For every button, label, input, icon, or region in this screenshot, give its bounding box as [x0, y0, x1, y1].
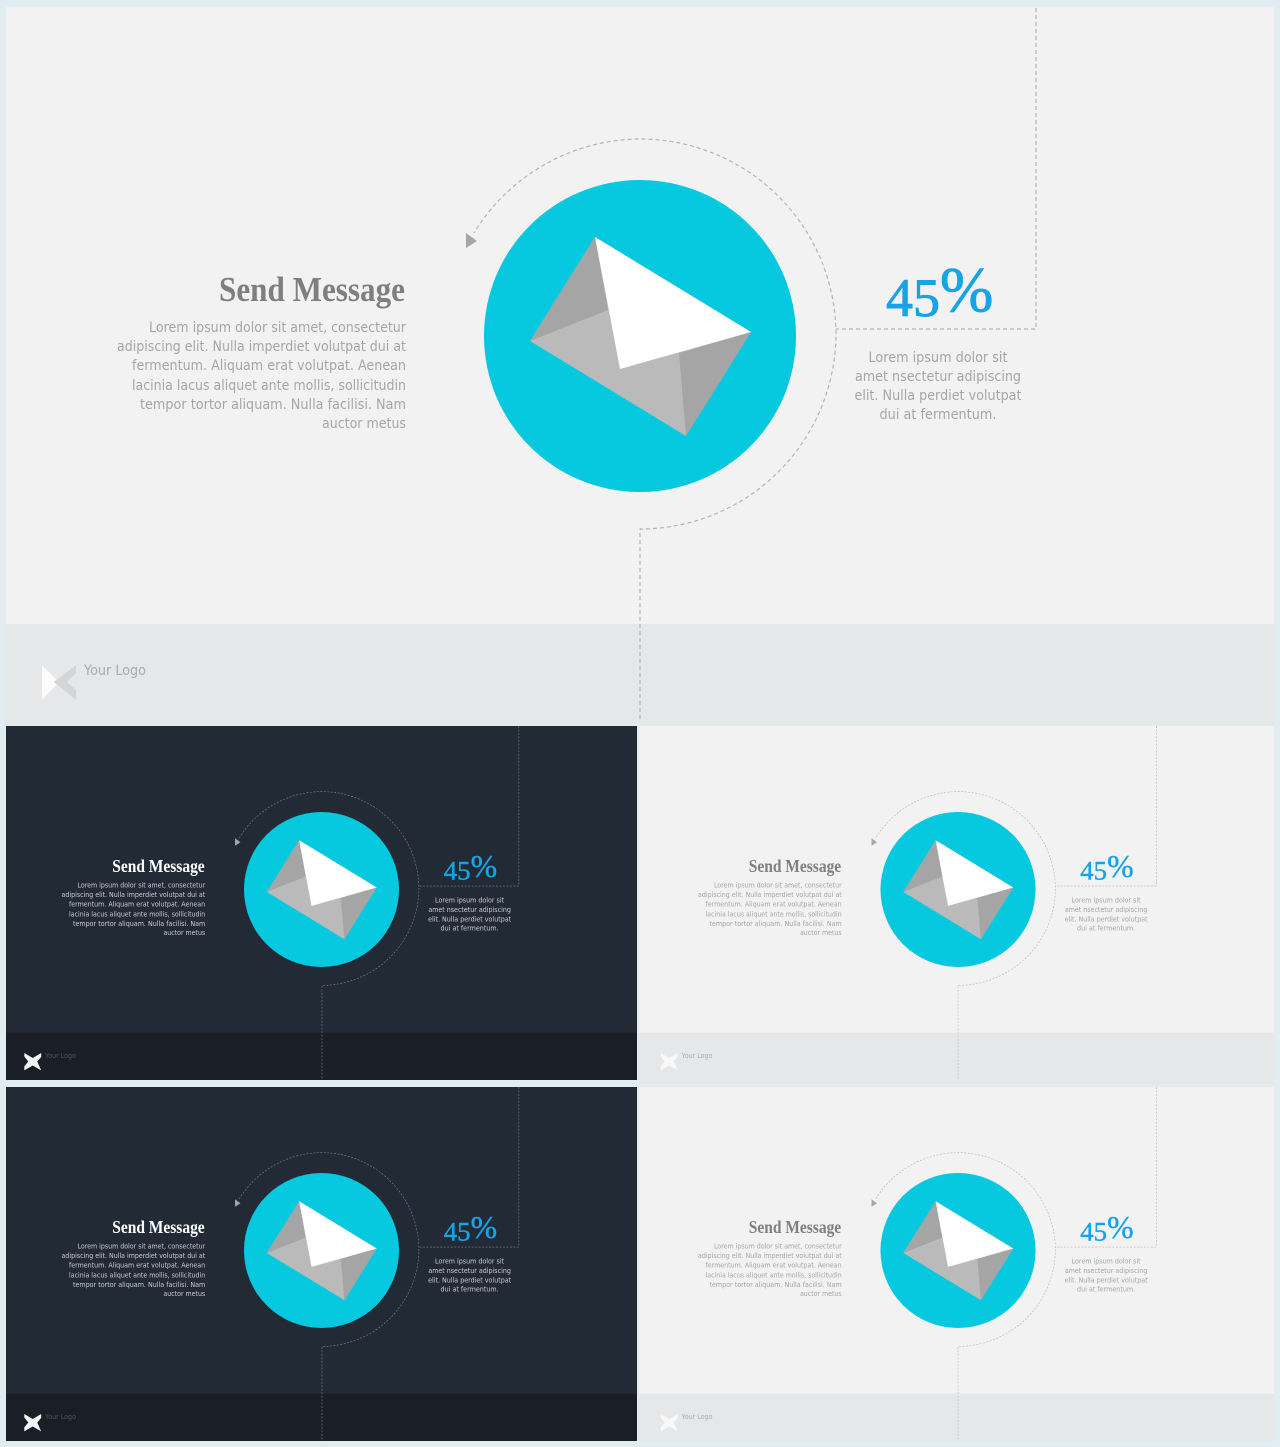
logo: Your Logo — [44, 1051, 76, 1060]
percentage figure: 45 — [444, 856, 471, 886]
dashed connector and ring with arrow — [466, 8, 1036, 719]
text block: description: tempor tortor aliquam. Nulla facilisi. Nam — [73, 1281, 205, 1289]
footer band — [6, 624, 1274, 725]
text block: description: lacinia lacus aliquet ante mollis, sollicitudin — [69, 910, 205, 918]
text block: percentage note: Lorem ipsum dolor sit — [435, 1257, 504, 1265]
text block: description: lacinia lacus aliquet ante mollis, sollicitudin — [132, 378, 406, 394]
text block: percentage note: Lorem ipsum dolor sit — [1072, 1257, 1141, 1265]
text block: description: adipiscing elit. Nulla imperdiet volutpat dui at — [62, 1252, 205, 1260]
text block: percentage note — [1065, 896, 1148, 933]
logo — [24, 1051, 76, 1070]
text block: description: Lorem ipsum dolor sit amet, consectetur — [714, 1243, 842, 1251]
text block: description — [62, 1243, 206, 1298]
icon: teal circle with envelope — [880, 812, 1036, 967]
text block: percentage note: elit. Nulla perdiet volutpat — [854, 388, 1022, 404]
percentage figure: 45 — [444, 1217, 471, 1247]
text block: description — [117, 320, 406, 432]
text block: description: adipiscing elit. Nulla imperdiet volutpat dui at — [62, 891, 205, 899]
text block: description: Lorem ipsum dolor sit amet, consectetur — [77, 1243, 205, 1251]
text block: description: fermentum. Aliquam erat volutpat. Aenean — [69, 900, 205, 908]
text block: description: Lorem ipsum dolor sit amet, consectetur — [714, 882, 842, 890]
percentage figure: % — [471, 849, 497, 884]
percentage figure: 45 — [1080, 1217, 1107, 1247]
footer band — [639, 1033, 1274, 1085]
text block: percentage note: elit. Nulla perdiet volutpat — [1065, 1276, 1148, 1284]
footer band — [639, 1394, 1274, 1441]
icon: teal circle with envelope — [484, 180, 796, 492]
text block: description: auctor metus — [800, 1290, 842, 1298]
logo: Your Logo — [681, 1051, 712, 1060]
panel: large light slide — [6, 7, 1274, 725]
dashed connector and ring with arrow — [872, 723, 1156, 1079]
text block: percentage note: dui at fermentum. — [441, 1286, 499, 1294]
text block: percentage note — [1065, 1257, 1148, 1294]
percentage figure: 45 — [1080, 856, 1107, 886]
text block: description — [62, 882, 206, 937]
text block: description: lacinia lacus aliquet ante mollis, sollicitudin — [706, 1271, 842, 1279]
text block: description: adipiscing elit. Nulla imperdiet volutpat dui at — [698, 1252, 842, 1260]
heading: Send Message — [112, 1218, 205, 1237]
dashed connector and ring with arrow — [235, 1084, 519, 1447]
text block: description: adipiscing elit. Nulla imperdiet volutpat dui at — [117, 339, 406, 355]
logo — [661, 1412, 712, 1431]
text block: percentage note — [428, 896, 511, 933]
icon: teal circle with envelope — [244, 1173, 399, 1328]
logo — [661, 1053, 712, 1070]
text block: percentage note: Lorem ipsum dolor sit — [868, 350, 1008, 366]
text block: percentage note: amet nsectetur adipiscing — [1065, 1267, 1147, 1275]
text block: description — [698, 1243, 842, 1298]
text block: description: auctor metus — [163, 929, 206, 937]
heading: Send Message — [219, 270, 405, 309]
panel: light slide top — [639, 726, 1274, 1079]
text block: percentage note: amet nsectetur adipiscing — [428, 1267, 511, 1275]
text block: description: tempor tortor aliquam. Nulla facilisi. Nam — [709, 920, 842, 928]
text block: description: adipiscing elit. Nulla imperdiet volutpat dui at — [698, 891, 842, 899]
text block: description: auctor metus — [163, 1290, 206, 1298]
heading: Send Message — [749, 857, 841, 876]
text block: percentage note: amet nsectetur adipiscing — [1065, 906, 1147, 914]
text block: percentage note: elit. Nulla perdiet volutpat — [428, 915, 511, 923]
percentage figure: % — [1107, 849, 1134, 884]
text block: percentage note: dui at fermentum. — [441, 925, 499, 933]
percentage figure: % — [940, 254, 993, 325]
heading: Send Message — [112, 857, 205, 876]
text block: percentage note: dui at fermentum. — [1077, 1286, 1135, 1294]
text block: description: fermentum. Aliquam erat volutpat. Aenean — [132, 358, 406, 374]
percentage figure: 45 — [886, 268, 940, 328]
text block: description: auctor metus — [322, 416, 406, 432]
text block: description: tempor tortor aliquam. Nulla facilisi. Nam — [709, 1281, 842, 1289]
panel: dark slide top — [6, 726, 637, 1080]
text block: percentage note: amet nsectetur adipiscing — [855, 369, 1021, 385]
text block: description: auctor metus — [800, 929, 842, 937]
text block: percentage note: dui at fermentum. — [1077, 925, 1135, 933]
panel: dark slide bottom — [6, 1087, 637, 1441]
dashed connector and ring with arrow — [872, 1084, 1156, 1447]
text block: description: Lorem ipsum dolor sit amet, consectetur — [149, 320, 406, 336]
text block: description: Lorem ipsum dolor sit amet, consectetur — [77, 882, 205, 890]
dashed connector and ring with arrow — [235, 726, 520, 1080]
text block: percentage note: dui at fermentum. — [880, 407, 996, 423]
text block: percentage note: Lorem ipsum dolor sit — [1072, 896, 1141, 904]
text block: percentage note — [854, 350, 1022, 423]
text block: description: tempor tortor aliquam. Nulla facilisi. Nam — [73, 920, 205, 928]
logo: Your Logo — [681, 1412, 712, 1421]
text block: description: fermentum. Aliquam erat volutpat. Aenean — [706, 900, 842, 908]
text block: description: fermentum. Aliquam erat volutpat. Aenean — [69, 1261, 205, 1269]
logo: Your Logo — [44, 1412, 76, 1421]
percentage figure: % — [1107, 1210, 1134, 1245]
text block: percentage note: Lorem ipsum dolor sit — [435, 896, 504, 904]
footer band — [6, 1032, 637, 1080]
panel: light slide bottom — [639, 1087, 1274, 1441]
text block: percentage note — [428, 1257, 511, 1294]
text block: description: lacinia lacus aliquet ante mollis, sollicitudin — [706, 910, 842, 918]
logo: Your Logo — [83, 663, 146, 679]
percentage figure: % — [471, 1210, 497, 1245]
text block: description: fermentum. Aliquam erat volutpat. Aenean — [706, 1261, 842, 1269]
logo — [42, 663, 146, 700]
text block: percentage note: elit. Nulla perdiet volutpat — [428, 1276, 511, 1284]
icon: teal circle with envelope — [244, 812, 399, 967]
footer band — [6, 1394, 637, 1441]
icon: teal circle with envelope — [880, 1173, 1036, 1328]
text block: percentage note: amet nsectetur adipiscing — [428, 906, 511, 914]
text block: description — [698, 882, 842, 937]
heading: Send Message — [749, 1218, 841, 1237]
text block: description: tempor tortor aliquam. Nulla facilisi. Nam — [140, 397, 406, 413]
text block: description: lacinia lacus aliquet ante mollis, sollicitudin — [69, 1271, 205, 1279]
text block: percentage note: elit. Nulla perdiet volutpat — [1065, 915, 1148, 923]
logo — [24, 1412, 76, 1431]
